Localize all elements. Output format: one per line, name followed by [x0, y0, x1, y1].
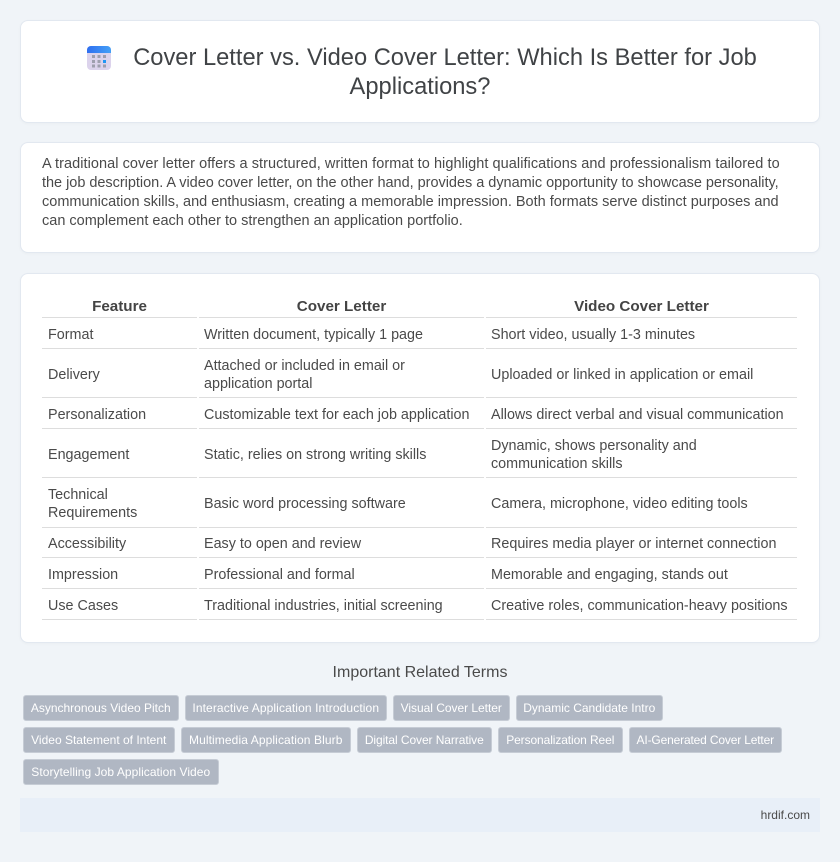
comparison table: Video Cover Letter: [574, 298, 709, 315]
comparison table: Personalization: [48, 407, 146, 423]
comparison table: Use Cases: [48, 598, 118, 614]
comparison table: Professional and formal: [204, 567, 355, 583]
comparison table: communication skills: [491, 456, 623, 472]
comparison table: Accessibility: [48, 536, 126, 552]
text block: intro paragraph: communication skills, and enthusiasm, creating a memorable impression. Both formats serve distinct purposes and: [42, 194, 779, 210]
tag group: related terms: Dynamic Candidate Intro: [523, 701, 655, 715]
footer bar: hrdif.com: [761, 808, 810, 822]
comparison table: Delivery: [48, 367, 100, 383]
comparison table: Short video, usually 1-3 minutes: [491, 327, 695, 343]
comparison table: Requires media player or internet connection: [491, 536, 776, 552]
comparison table: Attached or included in email or: [204, 358, 405, 374]
comparison table: Static, relies on strong writing skills: [204, 447, 426, 463]
title: [133, 45, 757, 100]
comparison table: Memorable and engaging, stands out: [491, 567, 728, 583]
text block: intro paragraph: can complement each other to strengthen an application portfolio.: [42, 213, 463, 229]
tag group: related terms: Personalization Reel: [506, 733, 614, 747]
text block: intro paragraph: A traditional cover letter offers a structured, written format to highlight qualifications and professionalism tailored to: [42, 156, 780, 172]
comparison table: Technical: [48, 487, 108, 503]
comparison table: Basic word processing software: [204, 496, 406, 512]
title: Cover Letter vs. Video Cover Letter: Which Is Better for Job: [133, 45, 757, 71]
comparison table: Format: [48, 327, 93, 343]
comparison table: application portal: [204, 376, 312, 392]
heading: related terms: Important Related Terms: [333, 664, 507, 681]
comparison table: Dynamic, shows personality and: [491, 438, 697, 454]
panel: header card: [20, 20, 820, 123]
comparison table: Impression: [48, 567, 118, 583]
comparison table: Requirements: [48, 505, 137, 521]
comparison table: Customizable text for each job application: [204, 407, 470, 423]
comparison table: Uploaded or linked in application or email: [491, 367, 753, 383]
comparison table: Camera, microphone, video editing tools: [491, 496, 748, 512]
comparison table: Creative roles, communication-heavy positions: [491, 598, 788, 614]
tag group: related terms: Visual Cover Letter: [401, 701, 502, 715]
tag group: related terms: Interactive Application Introduction: [192, 701, 379, 715]
tag group: related terms: Storytelling Job Application Video: [31, 765, 210, 779]
tag group: related terms: Multimedia Application Blurb: [189, 733, 343, 747]
text block: intro paragraph: the job description. A video cover letter, on the other hand, provides a dynamic opportunity to showcase personality,: [42, 175, 779, 191]
panel: intro card: [20, 142, 820, 253]
comparison table: Allows direct verbal and visual communication: [491, 407, 784, 423]
tag group: related terms: Digital Cover Narrative: [365, 733, 484, 747]
tag group: related terms: AI-Generated Cover Letter: [637, 733, 774, 747]
icon: calendar: [87, 46, 111, 70]
tag group: related terms: Asynchronous Video Pitch: [31, 701, 171, 715]
text block: intro paragraph: [42, 156, 780, 229]
tag group: related terms: Video Statement of Intent: [31, 733, 166, 747]
comparison table: Cover Letter: [297, 298, 386, 315]
comparison table: Traditional industries, initial screening: [204, 598, 443, 614]
panel: comparison table card: [20, 273, 820, 643]
comparison table: Engagement: [48, 447, 129, 463]
title: Applications?: [350, 74, 490, 100]
comparison table: Written document, typically 1 page: [204, 327, 423, 343]
comparison table: Easy to open and review: [204, 536, 361, 552]
comparison table: Feature: [92, 298, 147, 315]
comparison table: [42, 298, 797, 620]
footer bar: [20, 798, 820, 832]
